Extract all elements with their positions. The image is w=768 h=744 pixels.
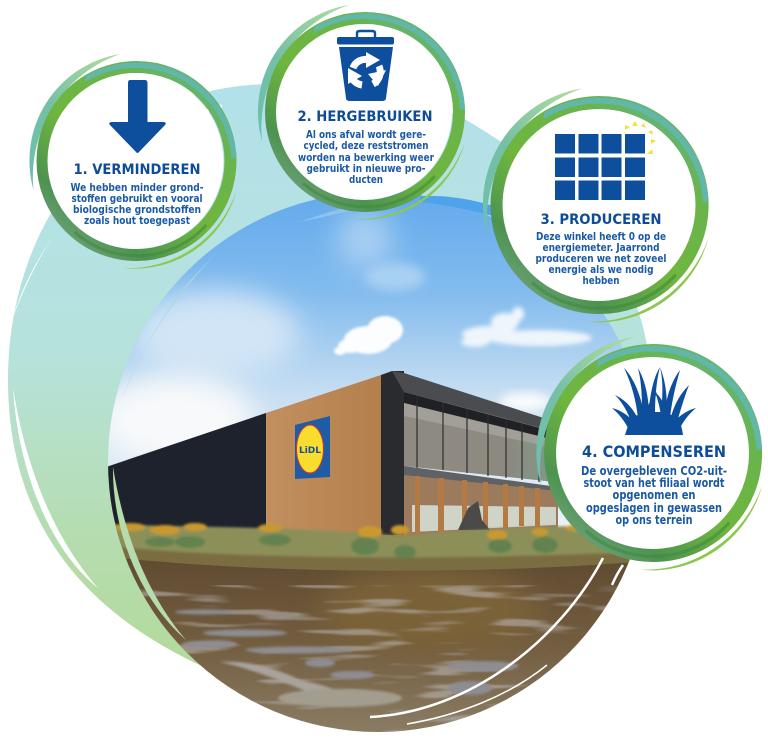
flowers: [106, 523, 640, 559]
text 2: cycled, deze reststromen: [304, 140, 428, 152]
sky: [100, 190, 660, 535]
text 3: hebben: [582, 275, 620, 287]
text 3: energie als we nodig: [548, 264, 654, 276]
white swoosh lines over water: [370, 558, 623, 724]
text 4: [581, 464, 727, 527]
text 4: opgenomen en: [612, 488, 696, 502]
heading 4: 4. COMPENSEREN: [582, 442, 726, 461]
lidl sign: [295, 416, 330, 479]
text 4: stoot van het filiaal wordt: [584, 476, 725, 490]
text 1: We hebben minder grond-: [70, 182, 204, 194]
text 1: [70, 182, 204, 227]
text 3: produceren we net zoveel: [536, 253, 666, 265]
text 3: energiemeter. Jaarrond: [542, 242, 660, 254]
text 3: Deze winkel heeft 0 op de: [536, 231, 666, 243]
store front: [404, 466, 558, 538]
photo: store with sky and water: [108, 192, 630, 732]
background swirl blob: [8, 83, 650, 673]
wood wall: [266, 375, 381, 535]
heading 2: 2. HERGEBRUIKEN: [298, 109, 432, 125]
icon: grass: [612, 367, 696, 435]
heading 3: 3. PRODUCEREN: [540, 212, 662, 228]
roof band: [392, 371, 556, 432]
text 2: gebruikt in nieuwe pro-: [306, 163, 426, 175]
circle 3: produceren: [483, 88, 709, 322]
dark corner column: [381, 371, 404, 535]
text 1: biologische grondstoffen: [73, 204, 201, 216]
black wall: [106, 413, 266, 535]
text 4: De overgebleven CO2-uit-: [581, 464, 727, 478]
text 2: worden na bewerking weer: [298, 152, 435, 164]
circle 2: hergebruiken: [258, 5, 465, 220]
icon: arrow down: [109, 80, 166, 153]
lidl sign: LiDL: [299, 446, 321, 456]
soil and ground band: [100, 532, 660, 571]
upper windows: [404, 392, 555, 482]
icon: solar panels: [555, 134, 645, 200]
icon: recycling bin: [337, 31, 394, 101]
clouds: [95, 210, 592, 465]
circle 1: verminderen: [29, 54, 237, 269]
text 4: op ons terrein: [616, 513, 692, 527]
green swoosh over photo edge: [113, 467, 186, 640]
text 2: [298, 129, 435, 186]
circle 4: compenseren: [536, 336, 762, 570]
water: [124, 555, 630, 732]
text 4: opgeslagen in gewassen: [586, 501, 722, 515]
text 1: stoffen gebruikt en vooral: [72, 193, 202, 205]
text 2: ducten: [349, 174, 383, 186]
text 2: Al ons afval wordt gere-: [306, 129, 426, 141]
heading 1: 1. VERMINDEREN: [74, 162, 200, 178]
text 1: zoals hout toegepast: [84, 215, 190, 227]
text 3: [536, 231, 666, 287]
blue arcs at top of photo: [122, 196, 540, 400]
icon: sun rays: [625, 121, 656, 154]
